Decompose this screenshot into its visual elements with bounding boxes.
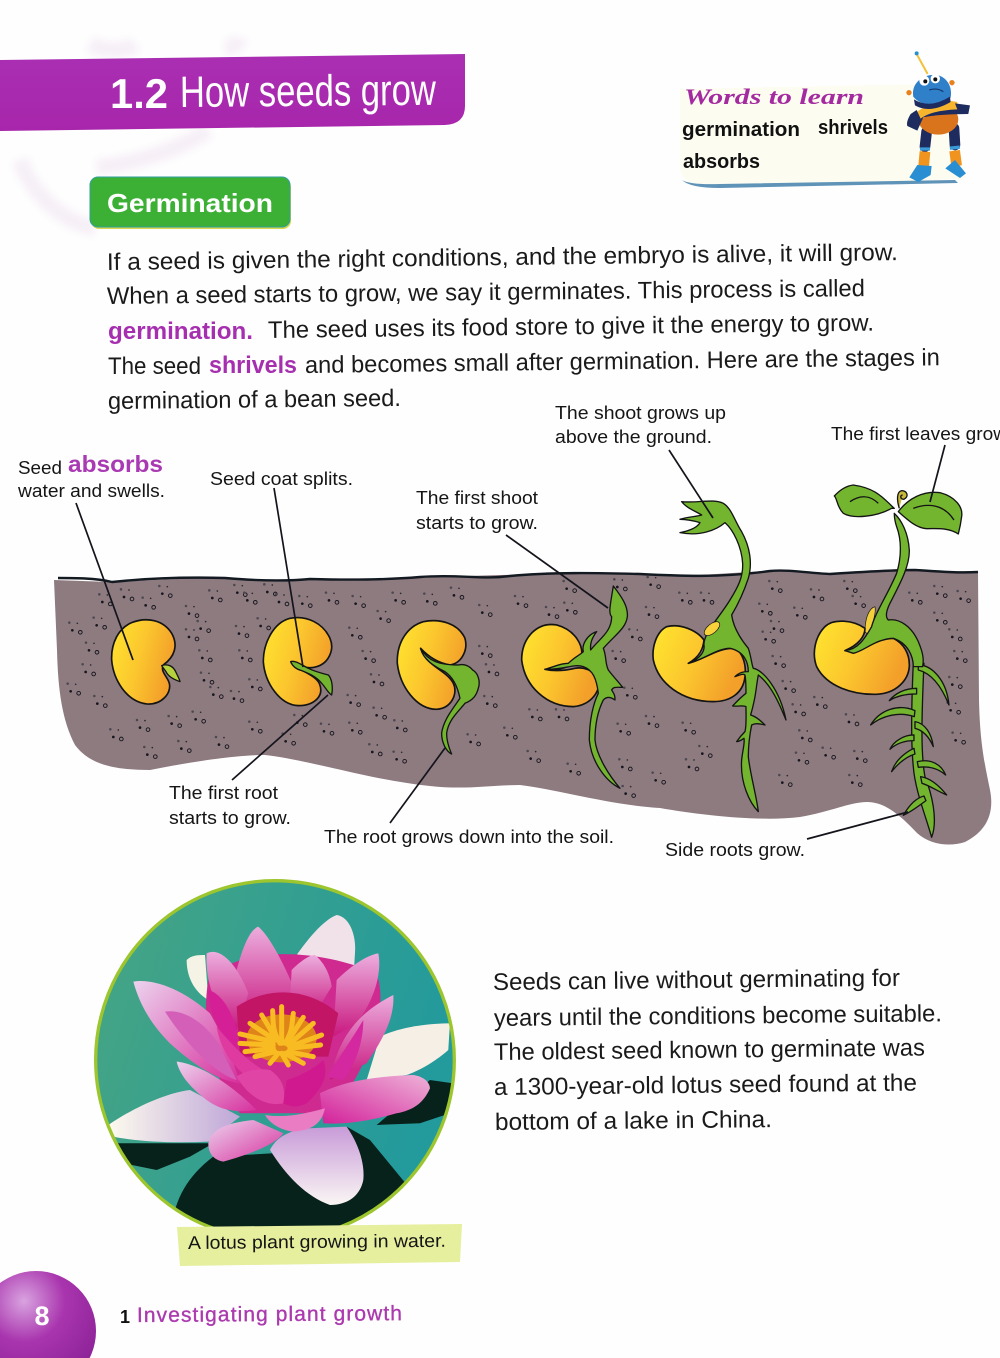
stage 2: coat splits, first root [263, 618, 332, 706]
lotus seed paragraph: The oldest seed known to germinate was [494, 1034, 925, 1066]
soil particles, left half [66, 583, 499, 763]
label: shoot above ground: The shoot grows up [555, 402, 726, 423]
label: shoot above ground: above the ground. [555, 426, 712, 447]
photo: lotus flower [95, 880, 455, 1240]
lotus seed paragraph: Seeds can live without germinating for [493, 965, 900, 996]
stages 4 to 6 [522, 485, 962, 837]
label: first root: The first root [169, 782, 278, 803]
vocabulary words: absorbs [683, 151, 760, 173]
stage 3: root grows down [397, 621, 479, 754]
caption strip: A lotus plant growing in water. [188, 1230, 446, 1253]
title text: How seeds grow [180, 66, 436, 117]
panel heading: Words to learn [684, 84, 864, 109]
icon: robot mascot [906, 51, 970, 182]
footer chapter title: 1 [120, 1307, 130, 1327]
label: shoot above ground [555, 402, 726, 447]
stages 1 to 3 [112, 618, 479, 754]
words to learn panel [680, 84, 965, 188]
intro paragraph: germination. [108, 318, 253, 345]
intro paragraph: shrivels [209, 352, 297, 379]
label: first shoot: starts to grow. [416, 512, 538, 533]
subheading badge: Germination: Germination [107, 188, 273, 218]
footer chapter title: Investigating plant growth [137, 1302, 402, 1327]
pale lily pads [108, 1090, 240, 1142]
intro paragraph: germination of a bean seed. [108, 385, 401, 415]
stage 4: first shoot [522, 586, 627, 788]
label: first root: starts to grow. [169, 807, 291, 828]
label: root grows down: The root grows down into the soil. [324, 826, 614, 847]
page number disc [0, 1271, 96, 1358]
soil particles, right half [503, 576, 970, 797]
lotus seed paragraph: a 1300-year-old lotus seed found at the [494, 1070, 917, 1101]
stage 1: swollen seed [112, 620, 180, 704]
callout lines [76, 445, 945, 839]
intro paragraph: If a seed is given the right conditions, and the embryo is alive, it will grow. [107, 239, 898, 276]
petals [133, 927, 430, 1205]
intro paragraph [107, 239, 940, 415]
stage 6: first leaves and side roots [814, 485, 962, 837]
soil cross-section [54, 570, 991, 845]
diagram: bean seed germination [17, 402, 1000, 860]
green rim [96, 881, 454, 1239]
label: first leaves: The first leaves grow [831, 423, 1000, 444]
label: first shoot [416, 487, 538, 533]
label: first shoot: The first shoot [416, 487, 538, 508]
intro paragraph: The seed uses its food store to give it the energy to grow. [268, 310, 874, 344]
intro paragraph: The seed [108, 353, 201, 380]
intro paragraph: When a seed starts to grow, we say it germinates. This process is called [107, 275, 865, 310]
stage 5: shoot above ground [653, 501, 786, 812]
label: seed absorbs water: absorbs [68, 451, 163, 477]
caption strip [177, 1224, 462, 1266]
title banner [0, 54, 465, 131]
subheading badge: Germination [90, 177, 291, 229]
intro paragraph: and becomes small after germination. Here are the stages in [305, 344, 940, 379]
vocabulary words [682, 117, 888, 173]
background swirl [20, 38, 240, 228]
label: seed absorbs water: water and swells. [17, 480, 165, 501]
page number disc: 8 [34, 1301, 50, 1331]
ground line [58, 570, 978, 582]
label: seed absorbs water: Seed [18, 457, 62, 478]
section number: 1.2 [110, 70, 168, 117]
lotus seed paragraph: bottom of a lake in China. [495, 1106, 772, 1136]
label: seed coat splits: Seed coat splits. [210, 468, 353, 489]
lotus seed paragraph: years until the conditions become suitable. [494, 1000, 942, 1032]
stamens [240, 1007, 322, 1065]
vocabulary words: shrivels [818, 117, 888, 139]
vocabulary words: germination [682, 119, 800, 141]
dark lily pad shadows [113, 1080, 453, 1227]
label: first root [169, 782, 291, 828]
lotus seed paragraph [493, 965, 942, 1136]
label: seed absorbs water [17, 451, 165, 501]
label: side roots: Side roots grow. [665, 839, 805, 860]
